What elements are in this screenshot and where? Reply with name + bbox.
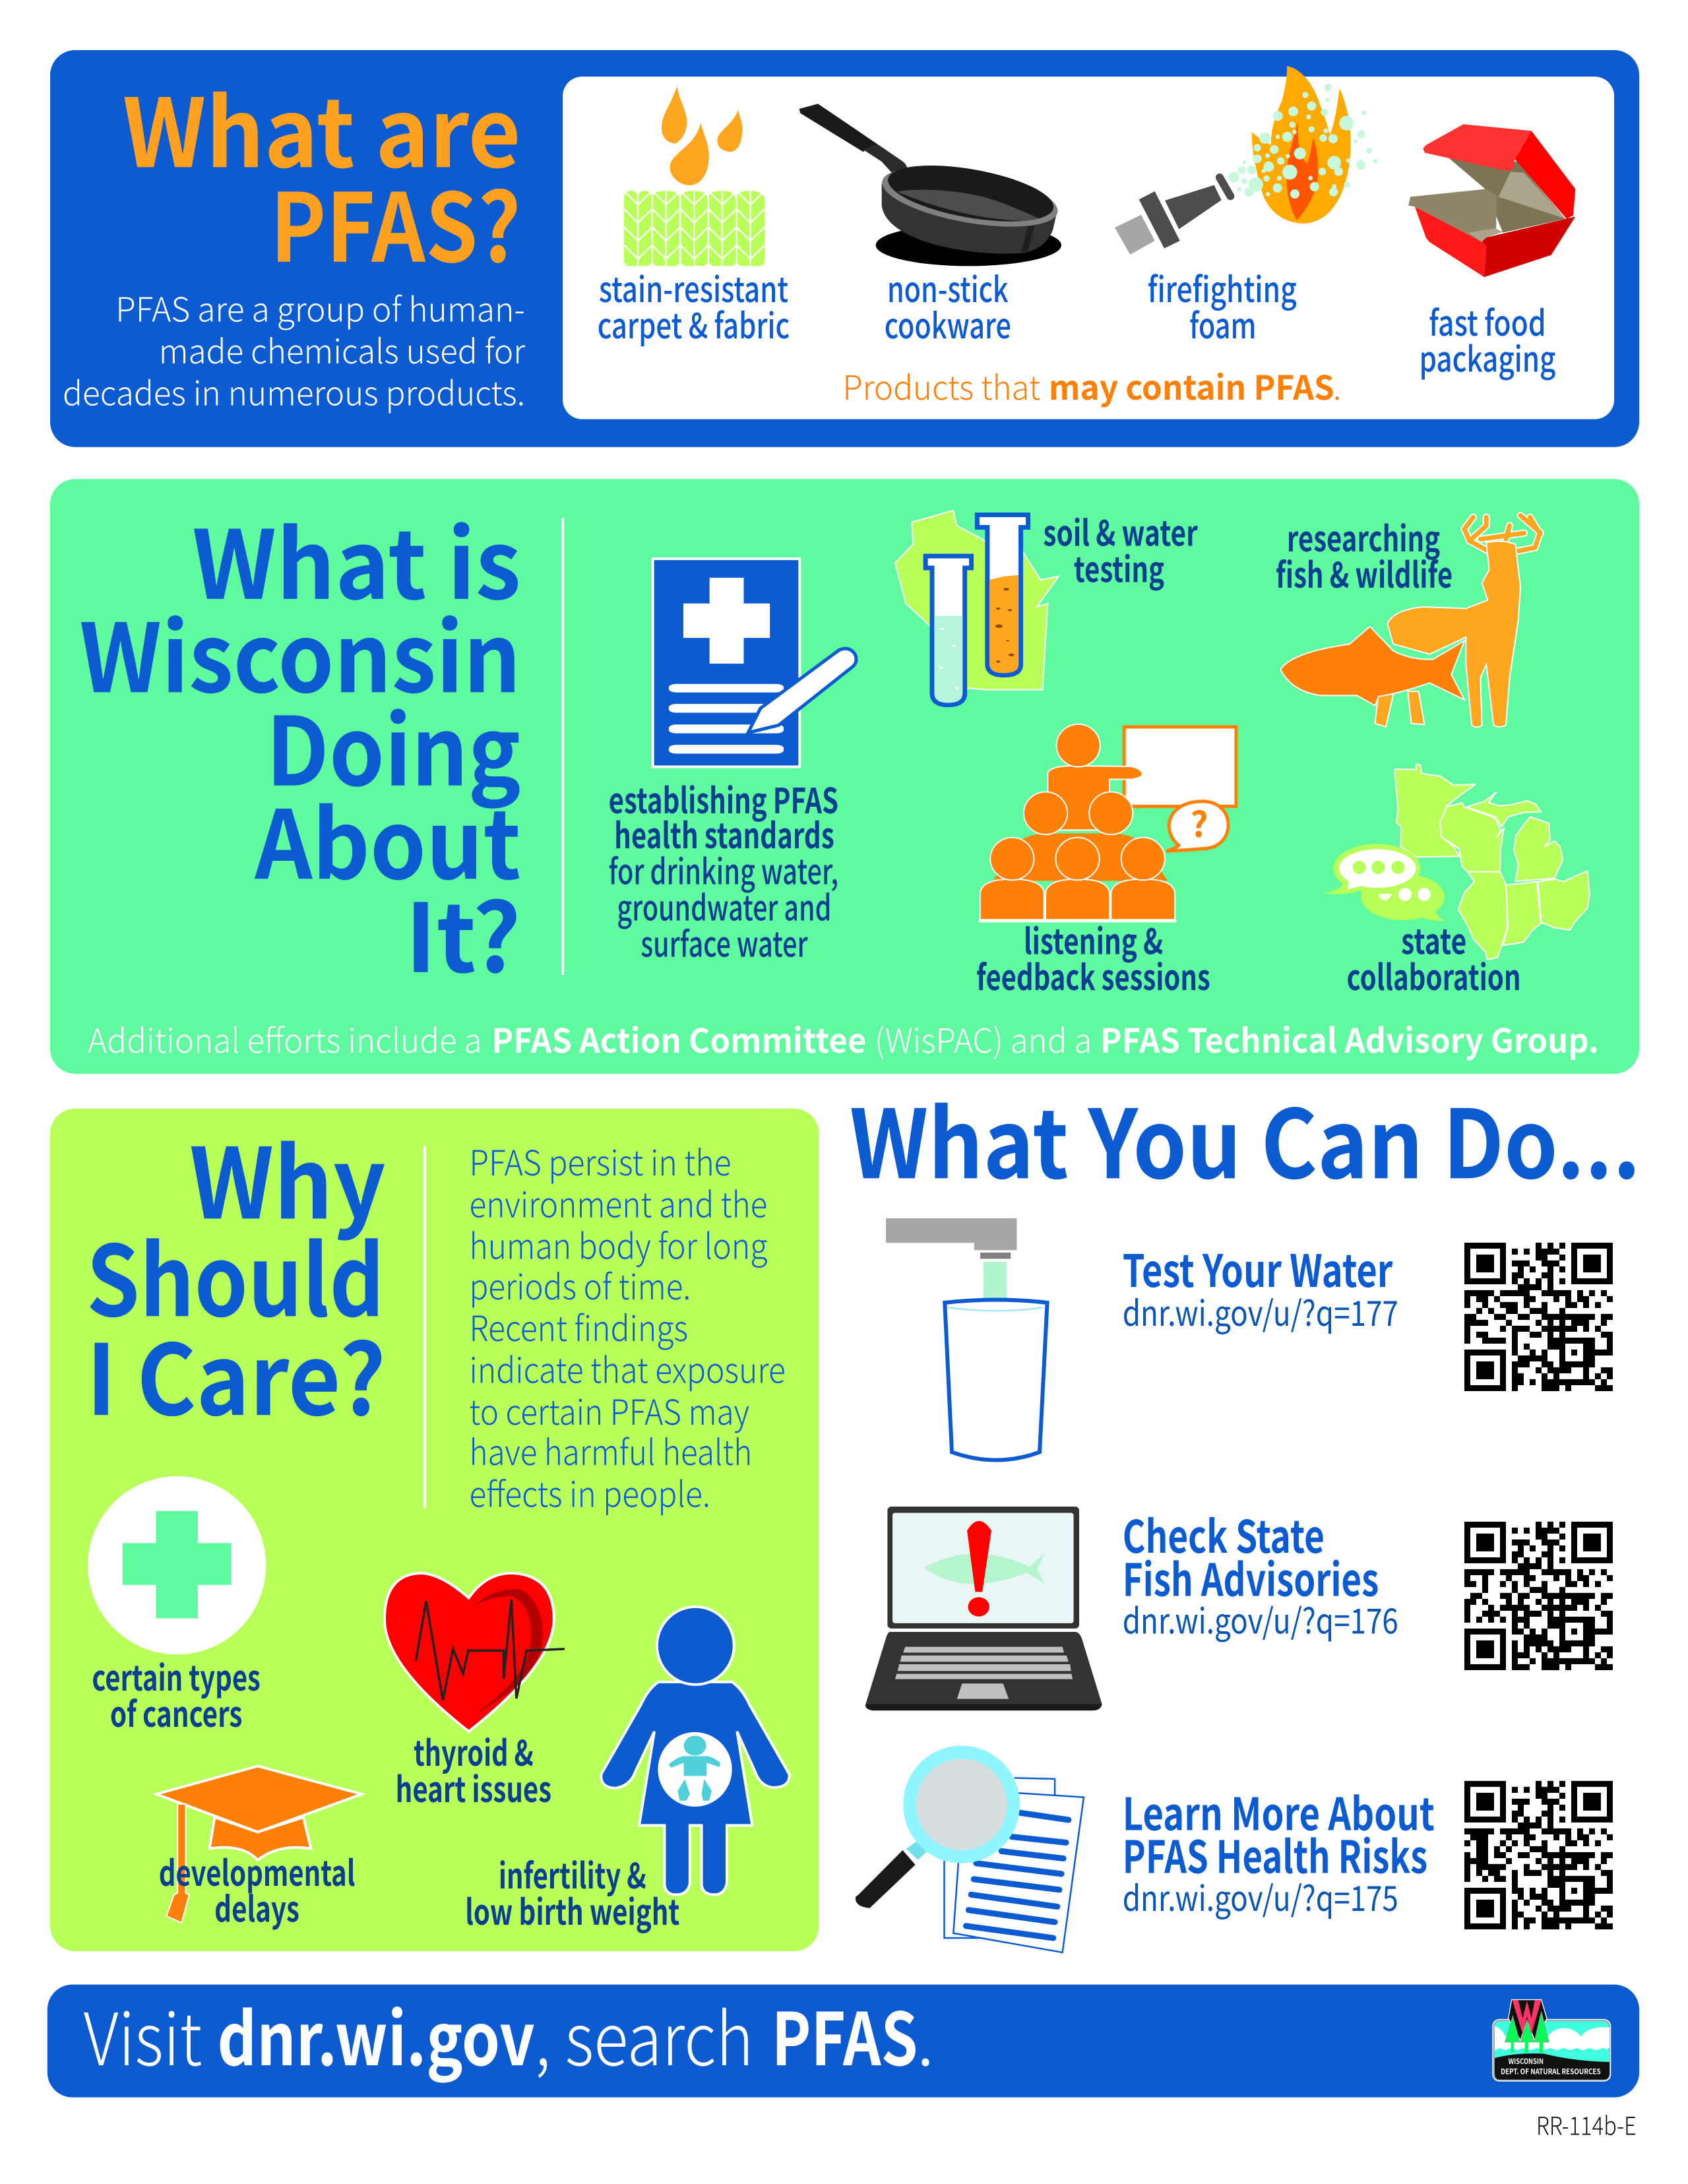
text: visit dnr.wi.gov, search PFAS: PFAS [772,1981,918,2086]
text: PFAS definition: decades in numerous products. [63,366,525,415]
label: researching fish and wildlife [1276,512,1453,598]
label: establishing PFAS health standards: groundwater and [617,881,831,931]
label: developmental delays [159,1846,355,1933]
label: listening and feedback sessions [976,914,1210,1001]
icon: medical document and pen [653,559,856,767]
text: additional efforts: PFAS Technical Advisory Group. [1100,1014,1599,1063]
icon: magnifying glass and documents [856,1745,1084,1952]
icon: faucet and glass [886,1218,1047,1460]
heading: why should I care: Why [189,1106,386,1247]
text: PFAS persistence and health effects: PFAS persist in the [470,1136,731,1186]
label: thyroid and heart issues: heart issues [396,1763,551,1813]
text: PFAS persistence and health effects: periods of time. [470,1260,691,1310]
footer banner [47,1981,1639,2098]
caption: products that may contain PFAS [842,361,1341,410]
label: thyroid and heart issues: thyroid & [414,1726,534,1776]
label: state collaboration: collaboration [1347,951,1521,1001]
label: developmental delays: delays [214,1883,299,1933]
caption: products that may contain PFAS: . [1333,361,1341,410]
label: soil and water testing: soil & water [1043,507,1199,557]
heading: why should I care: Should [86,1203,385,1344]
text: learn more about PFAS health risks: dnr.wi.gov/u/?q=175 [1123,1871,1398,1921]
label: non-stick cookware: cookware [885,299,1011,349]
panel: why should I care [50,1106,819,1951]
label: infertility and low birth weight: infertility & [499,1849,646,1899]
text: PFAS definition [63,283,526,415]
text: visit dnr.wi.gov, search PFAS: . [916,1981,935,2086]
publication number: RR-114b-E [1536,2106,1637,2142]
icon: graduation cap [156,1766,361,1923]
text: learn more about PFAS health risks [1123,1779,1435,1921]
icon: non-stick frying pan [799,104,1062,266]
label: state collaboration: state [1401,914,1466,964]
label: firefighting foam: firefighting [1148,263,1297,313]
label: certain types of cancers: of cancers [110,1687,242,1737]
text: test your water [1123,1236,1398,1336]
icon: fast food box [1408,124,1575,277]
label: stain-resistant carpet and fabric [598,263,790,349]
icon: pregnant figure [601,1607,790,1894]
text: visit dnr.wi.gov, search PFAS: , search [535,1981,753,2086]
label: certain types of cancers [92,1651,261,1737]
heading: what is Wisconsin doing about it: Wisconsin [79,582,521,720]
label: fast food packaging [1419,296,1555,383]
label: non-stick cookware: non-stick [887,263,1009,313]
label: establishing PFAS health standards [609,774,838,967]
text: PFAS persistence and health effects: to certain PFAS may [470,1385,749,1435]
icon: stain-resistant carpet with drops [624,86,765,266]
text: visit dnr.wi.gov, search PFAS: dnr.wi.gov [217,1981,535,2086]
label: soil and water testing: testing [1074,543,1164,593]
label: fast food packaging: fast food [1429,296,1546,346]
label: firefighting foam: foam [1189,299,1256,349]
logo: Wisconsin DNR: WISCONSIN [1509,2056,1544,2067]
text: check state fish advisories: dnr.wi.gov/u/?q=176 [1123,1594,1398,1644]
logo: Wisconsin DNR [1492,2000,1611,2082]
text: PFAS persistence and health effects [470,1136,786,1517]
icon: deer and fish [1280,516,1540,728]
heading: why should I care: I Care? [86,1302,386,1443]
text: PFAS definition: PFAS are a group of human- [115,283,525,332]
label: state collaboration [1347,914,1521,1001]
label: listening and feedback sessions: feedback sessions [976,951,1210,1001]
label: establishing PFAS health standards: establishing PFAS [609,774,838,824]
icon: medical cross in circle [88,1476,266,1654]
label: researching fish and wildlife: fish & wildlife [1276,548,1453,598]
text: PFAS persistence and health effects: human body for long [470,1220,768,1270]
text: check state fish advisories: Fish Advisories [1123,1545,1379,1609]
icon: laptop with fish alert [865,1507,1102,1710]
caption: products that may contain PFAS: Products that [842,361,1040,410]
heading: what are PFAS: What are [123,57,521,195]
label: listening and feedback sessions: listening & [1024,914,1163,964]
label: fast food packaging: packaging [1419,332,1555,383]
QR code: PFAS health risks [1464,1784,1613,1926]
text: additional efforts [88,1014,1599,1063]
label: establishing PFAS health standards: health standards [614,809,834,859]
heading: what is Wisconsin doing about it: It? [405,863,521,1000]
text: PFAS persistence and health effects: have harmful health [470,1425,752,1476]
text: PFAS persistence and health effects: Recent findings [470,1301,688,1352]
label: stain-resistant carpet and fabric: stain-resistant [599,263,788,313]
QR code: test your water [1464,1245,1613,1388]
label: thyroid and heart issues [396,1726,551,1813]
text: PFAS persistence and health effects: environment and the [470,1177,767,1228]
text: visit dnr.wi.gov, search PFAS: Visit [84,1981,202,2086]
text: check state fish advisories [1123,1502,1398,1644]
label: certain types of cancers: certain types [92,1651,261,1701]
caption: products that may contain PFAS: may contain PFAS [1049,361,1334,410]
label: establishing PFAS health standards: for drinking water, [609,845,838,895]
label: establishing PFAS health standards: surface water [641,917,808,967]
text: test your water: dnr.wi.gov/u/?q=177 [1123,1286,1398,1336]
label: developmental delays: developmental [159,1846,355,1896]
text: learn more about PFAS health risks: PFAS Health Risks [1123,1823,1427,1887]
panel: what are PFAS [50,50,1639,447]
heading: what is Wisconsin doing about it [79,489,521,1000]
icon: heart with ECG [385,1573,565,1732]
text: PFAS persistence and health effects: effects in people. [470,1467,710,1517]
heading: what is Wisconsin doing about it: Doing [266,676,521,813]
heading: what are PFAS [123,57,521,290]
text: additional efforts: Additional efforts include a [88,1014,482,1063]
label: researching fish and wildlife: researching [1287,512,1440,562]
icon: presenter and audience [979,724,1236,922]
text: additional efforts: (WisPAC) and a [875,1014,1092,1063]
text: test your water: Test Your Water [1123,1236,1393,1300]
logo: Wisconsin DNR: DEPT. OF NATURAL RESOURCES [1501,2067,1601,2077]
heading: what is Wisconsin doing about it: About [254,769,521,906]
icon: Wisconsin map and test tubes [895,511,1059,705]
label: firefighting foam [1148,263,1297,349]
text: PFAS definition: made chemicals used for [159,325,526,373]
heading: what is Wisconsin doing about it: What is [192,489,521,627]
icon: question mark: ? [1190,797,1208,848]
text: PFAS persistence and health effects: indicate that exposure [470,1344,786,1394]
label: soil and water testing [1043,507,1199,593]
icon: firefighting foam nozzle and flame [1115,66,1377,255]
QR code: fish advisories [1464,1524,1613,1667]
heading: what are PFAS: PFAS? [270,152,521,290]
text: additional efforts: PFAS Action Committee [491,1014,866,1063]
label: infertility and low birth weight [465,1849,679,1935]
icon: midwest states map and chat bubbles [1324,764,1590,960]
text: check state fish advisories: Check State [1123,1502,1325,1566]
label: stain-resistant carpet and fabric: carpet & fabric [598,299,790,349]
panel: what is Wisconsin doing [50,479,1639,1074]
text: learn more about PFAS health risks: Learn More About [1123,1779,1435,1843]
label: infertility and low birth weight: low birth weight [465,1885,679,1935]
text: visit dnr.wi.gov, search PFAS [84,1981,935,2086]
label: non-stick cookware [885,263,1011,349]
heading: why should I care [86,1106,386,1443]
